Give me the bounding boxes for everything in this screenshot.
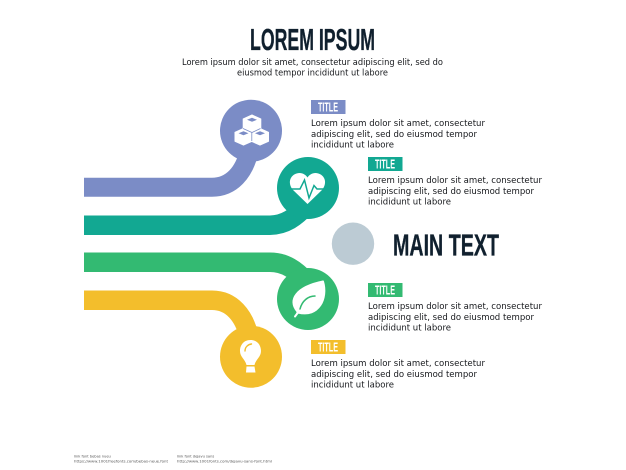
label block: yellow: Lorem ipsum dolor sit amet, consectetur — [311, 359, 485, 369]
icon: cubes — [235, 115, 268, 145]
label block: purple: TITLE — [318, 100, 338, 114]
label block: teal: Lorem ipsum dolor sit amet, consectetur — [368, 176, 542, 186]
label block: teal: incididunt ut labore — [368, 198, 451, 208]
label block: purple: Lorem ipsum dolor sit amet, consectetur — [311, 119, 485, 129]
branch: purple line and circle — [84, 100, 282, 187]
label block: teal: adipiscing elit, sed do eiusmod tempor — [368, 187, 534, 197]
footer font credits: link font dejavu sans — [177, 454, 214, 458]
icon: light bulb — [240, 340, 261, 372]
label block: green — [368, 283, 542, 334]
branch: yellow line and circle — [84, 300, 282, 388]
label block: yellow: adipiscing elit, sed do eiusmod tempor — [311, 370, 477, 380]
subtitle text: Lorem ipsum dolor sit amet, consectetur adipiscing elit, sed do — [182, 58, 443, 68]
icon: leaf — [293, 282, 324, 316]
footer font credits: link font bebas nueu — [74, 454, 111, 458]
label block: purple — [311, 100, 485, 150]
label block: yellow: incididunt ut labore — [311, 380, 394, 390]
icon: heart with pulse — [289, 173, 326, 204]
label block: teal — [368, 157, 542, 208]
label block: yellow — [311, 340, 485, 390]
subtitle text: eiusmod tempor incididunt ut labore — [237, 68, 388, 78]
label block: yellow: TITLE — [318, 340, 338, 354]
footer font credits: http://www.1001fonts.com/dejavu-sans-font.html — [177, 460, 272, 464]
branch: teal line and circle — [84, 157, 339, 225]
subtitle text — [182, 58, 443, 78]
label block: green: incididunt ut labore — [368, 324, 451, 334]
label block: green: Lorem ipsum dolor sit amet, consectetur — [368, 302, 542, 312]
main text: MAIN TEXT — [393, 228, 499, 262]
title: LOREM IPSUM — [250, 22, 375, 57]
footer font credits: https://www.1001freefonts.com/bebas-neue.font — [74, 460, 169, 464]
label block: purple: adipiscing elit, sed do eiusmod tempor — [311, 130, 477, 140]
label block: green: adipiscing elit, sed do eiusmod tempor — [368, 313, 534, 323]
label block: teal: TITLE — [375, 158, 395, 172]
label block: green: TITLE — [375, 284, 395, 298]
label block: purple: incididunt ut labore — [311, 140, 394, 150]
grey centre circle — [332, 222, 374, 265]
footer font credits — [74, 454, 272, 464]
branch: green line and circle — [84, 262, 339, 330]
